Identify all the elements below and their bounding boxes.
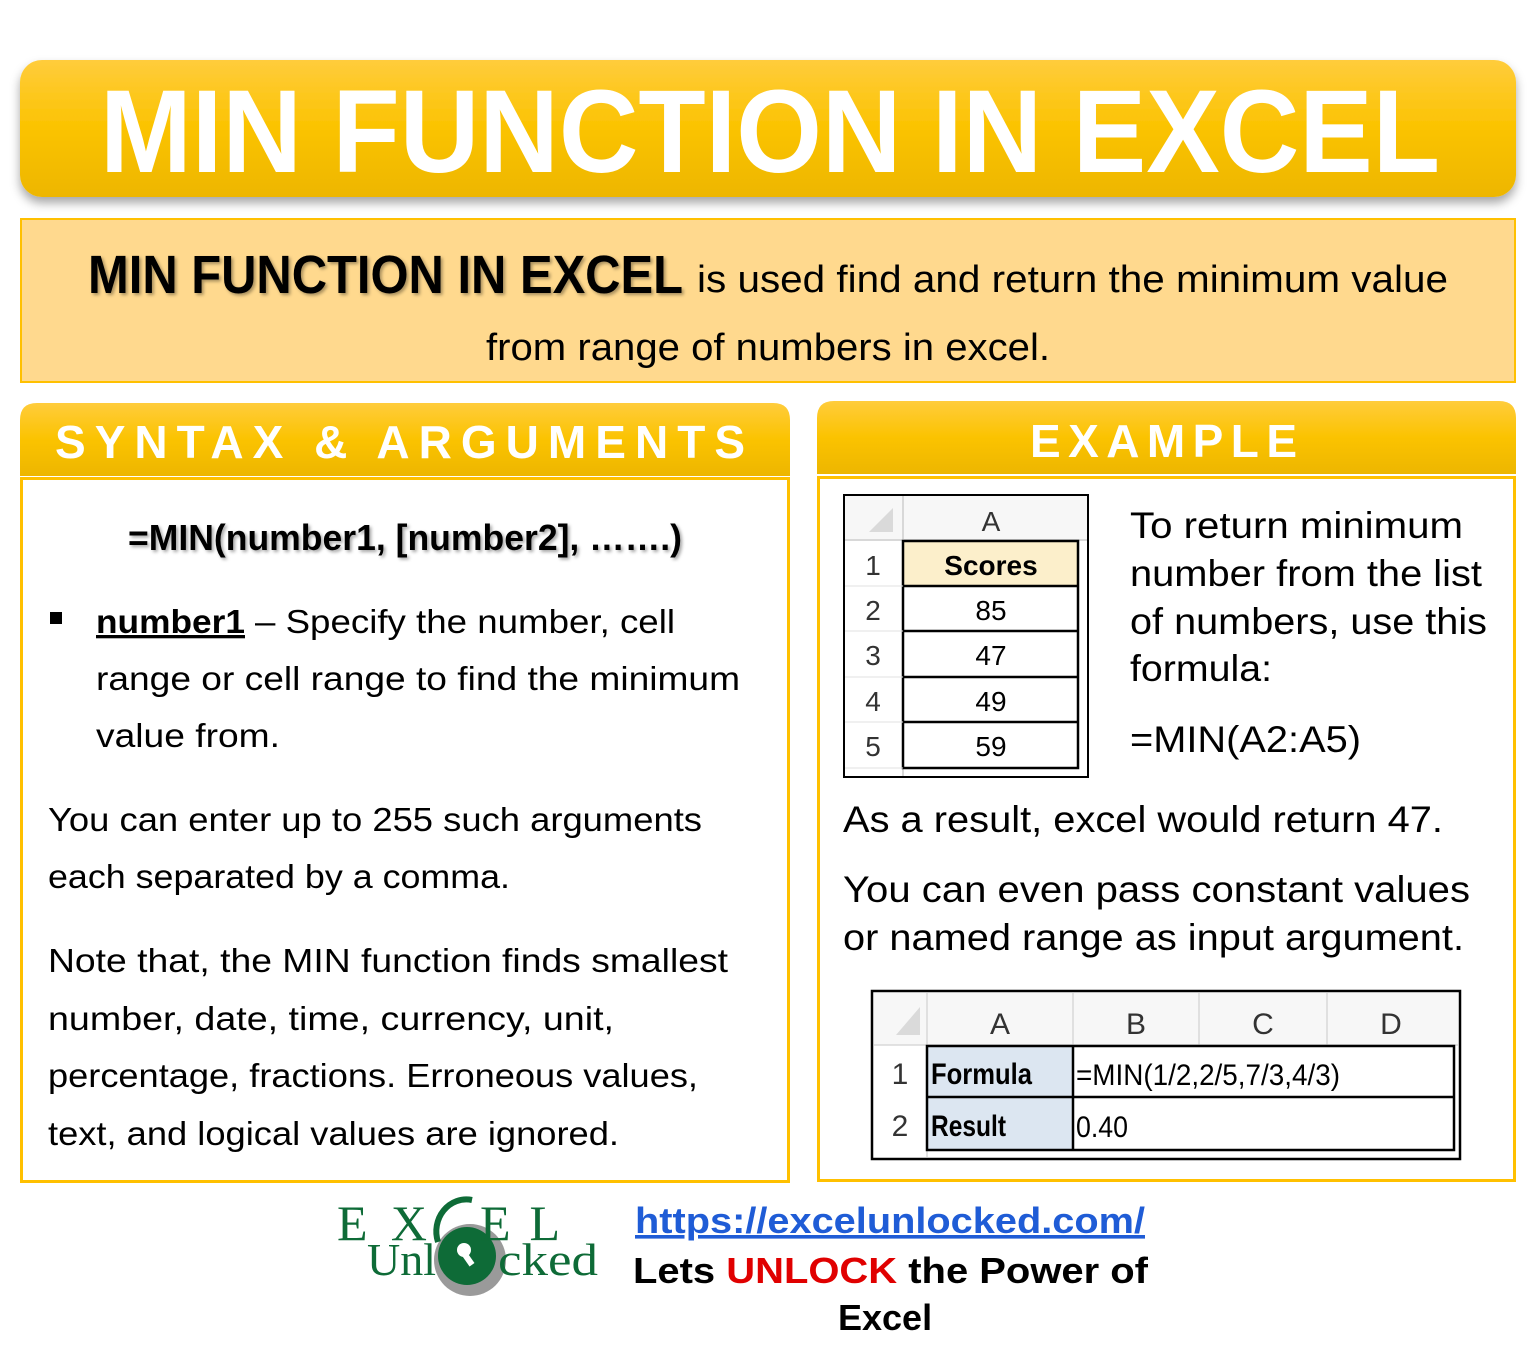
syntax formula: =MIN(number1, [number2], …….) — [128, 517, 682, 558]
text: formula description: number from the list — [1130, 553, 1483, 594]
table: scores: A — [982, 506, 1001, 537]
text: constant values — [843, 869, 1470, 958]
logo: excel unlocked: cked — [498, 1234, 598, 1285]
definition box: is used find and return the minimum value — [697, 259, 1448, 301]
logo: excel unlocked: EL — [480, 1195, 560, 1251]
text: 255 arguments — [48, 801, 702, 895]
table: formula result: =MIN(1/2,2/5,7/3,4/3) — [1076, 1059, 1340, 1092]
text: constant values: or named range as input argument. — [843, 917, 1464, 958]
table: formula result: 0.40 — [1076, 1111, 1128, 1144]
table: scores: 47 — [975, 640, 1007, 671]
header: syntax & arguments — [20, 403, 790, 476]
footer: url and tagline: Excel — [838, 1297, 932, 1338]
table: formula result: C — [1252, 1008, 1274, 1041]
header: example: EXAMPLE — [1030, 415, 1297, 467]
footer: url and tagline — [633, 1200, 1149, 1338]
bullet: number1 — [50, 603, 740, 754]
text: 255 arguments: You can enter up to 255 such arguments — [48, 801, 702, 838]
text: 255 arguments: each separated by a comma. — [48, 858, 510, 895]
text: formula description: =MIN(A2:A5) — [1130, 719, 1361, 760]
table: formula result: A — [990, 1008, 1010, 1041]
table: scores: 1 — [865, 550, 881, 581]
bullet: number1: – Specify the number, cell — [255, 603, 675, 640]
text: note — [48, 942, 728, 1152]
text: note: number, date, time, currency, unit, — [48, 1000, 614, 1037]
table: formula result: Formula — [931, 1058, 1032, 1091]
text: constant values: You can even pass constant values — [843, 869, 1470, 910]
table: scores: 2 — [865, 595, 881, 626]
text: formula description: To return minimum — [1130, 505, 1463, 546]
text: result: As a result, excel would return 47. — [843, 799, 1443, 840]
logo: excel unlocked: EX — [337, 1195, 427, 1251]
table: scores: 85 — [975, 595, 1007, 626]
table: formula result — [872, 991, 1460, 1159]
bullet: number1: value from. — [96, 717, 280, 754]
panel: example — [818, 478, 1514, 1180]
bullet: number1: range or cell range to find the minimum — [96, 660, 740, 697]
definition box: from range of numbers in excel. — [486, 327, 1050, 369]
bullet: number1: number1 — [96, 603, 245, 640]
header: example — [817, 401, 1516, 474]
table: formula result: Result — [931, 1110, 1006, 1143]
table: formula result: B — [1126, 1008, 1146, 1041]
logo: excel unlocked — [337, 1195, 598, 1296]
text: note: percentage, fractions. Erroneous values, — [48, 1057, 698, 1094]
definition box: MIN FUNCTION IN EXCEL — [88, 245, 683, 305]
footer: url and tagline: https://excelunlocked.com/ — [635, 1200, 1145, 1241]
table: scores: 5 — [865, 731, 881, 762]
text: formula description: of numbers, use this — [1130, 601, 1487, 642]
table: scores: 49 — [975, 686, 1007, 717]
header: syntax & arguments: SYNTAX & ARGUMENTS — [55, 416, 745, 468]
table: scores — [844, 495, 1088, 777]
footer: url and tagline: Lets UNLOCK the Power of — [633, 1250, 1149, 1291]
logo: excel unlocked: Unl — [367, 1234, 436, 1285]
text: note: text, and logical values are ignored. — [48, 1115, 619, 1152]
table: scores: 59 — [975, 731, 1007, 762]
table: scores: 3 — [865, 640, 881, 671]
table: formula result: 2 — [892, 1110, 908, 1143]
table: scores: 4 — [865, 686, 881, 717]
text: formula description: formula: — [1130, 648, 1272, 689]
table: formula result: 1 — [892, 1058, 908, 1091]
panel: syntax & arguments — [22, 478, 788, 1182]
table: formula result: D — [1380, 1008, 1402, 1041]
text: formula description — [1130, 505, 1487, 760]
title banner: MIN FUNCTION IN EXCEL — [100, 66, 1440, 198]
definition box — [21, 219, 1515, 382]
text: note: Note that, the MIN function finds smallest — [48, 942, 728, 979]
table: scores: Scores — [944, 550, 1038, 581]
